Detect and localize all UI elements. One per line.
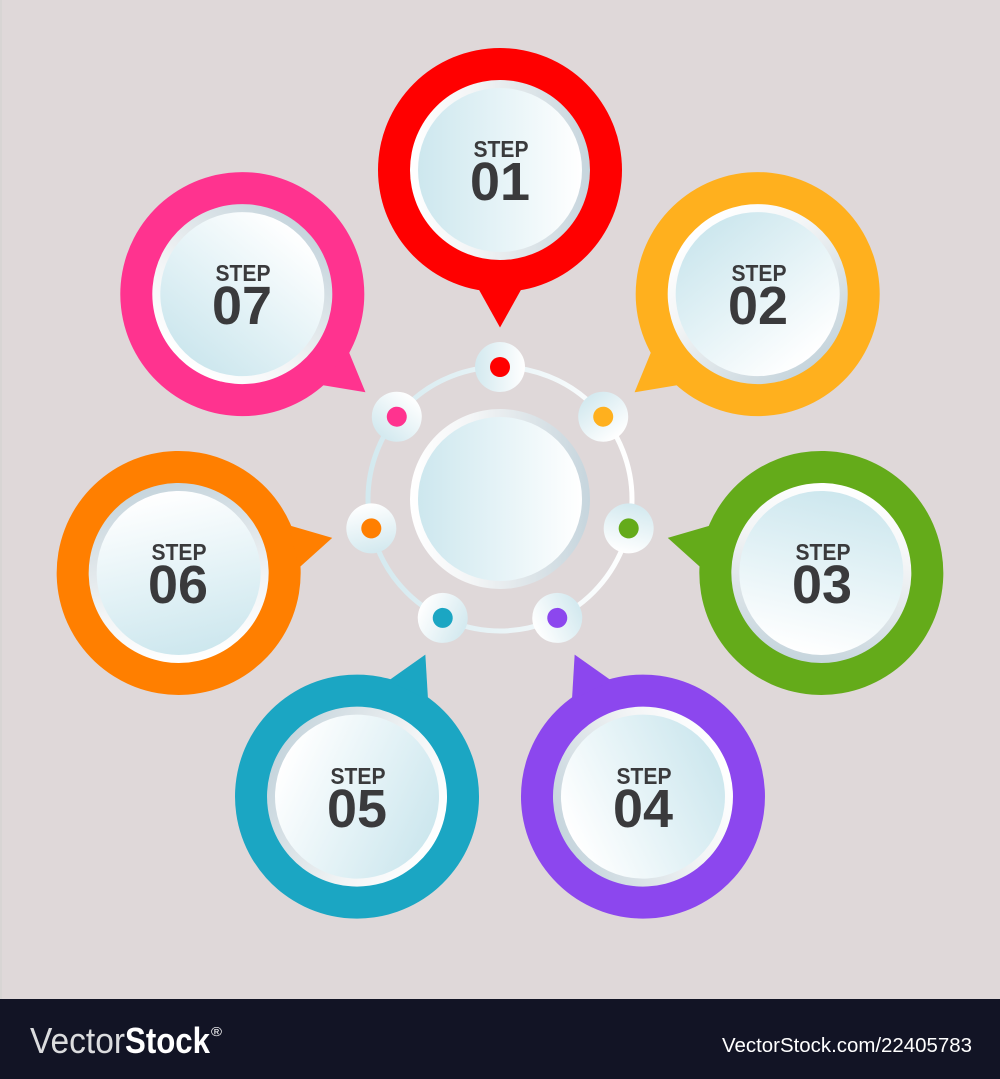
label: step 03: STEP [796,539,850,565]
central hub diagram [341,342,659,651]
panel: step 01 [378,48,622,328]
label: step 02: STEP [732,260,786,286]
label: step 05: 05 [327,779,387,839]
panel: step 05 [194,602,535,959]
label: step 01: 01 [470,152,530,212]
center disc [410,409,590,589]
node: step 07 [362,382,432,452]
node: step 01 [475,342,525,392]
panel: step 06 [33,419,359,719]
pin: step 03 [641,419,967,719]
node: step 05 [409,585,476,651]
pin: step 05 [194,602,535,959]
node: step 02 [568,382,638,452]
label: step 03: 03 [792,555,852,615]
label: step 06: 06 [148,555,208,615]
pin: step 06 [33,419,359,719]
node: step 03 [599,498,659,558]
label: step 04: STEP [616,763,672,789]
logo: VectorStock: Vector [30,1020,125,1061]
footer bar [0,999,1000,1079]
pin: step 04 [465,602,806,959]
label: step 07: STEP [216,260,270,286]
label: step 04: 04 [613,779,673,839]
pin: step 01 [378,48,622,328]
image id text: VectorStock.com/22405783 [722,1035,972,1057]
pin: step 02 [558,123,929,488]
panel: step 03 [641,419,967,719]
panel: step 02 [558,123,929,488]
label: step 07: 07 [212,276,272,336]
logo: VectorStock [30,1020,222,1061]
panel: step 04 [465,602,806,959]
label: step 05: STEP [330,763,386,789]
logo: VectorStock: ® [211,1024,222,1039]
label: step 01: STEP [474,136,528,162]
node: step 06 [341,498,401,558]
label: step 06: STEP [152,539,206,565]
label: step 02: 02 [728,276,788,336]
node: step 04 [524,585,591,651]
pin: step 07 [71,123,442,488]
panel: step 07 [71,123,442,488]
logo: VectorStock: Stock [125,1020,211,1061]
orbit ring [368,367,632,631]
